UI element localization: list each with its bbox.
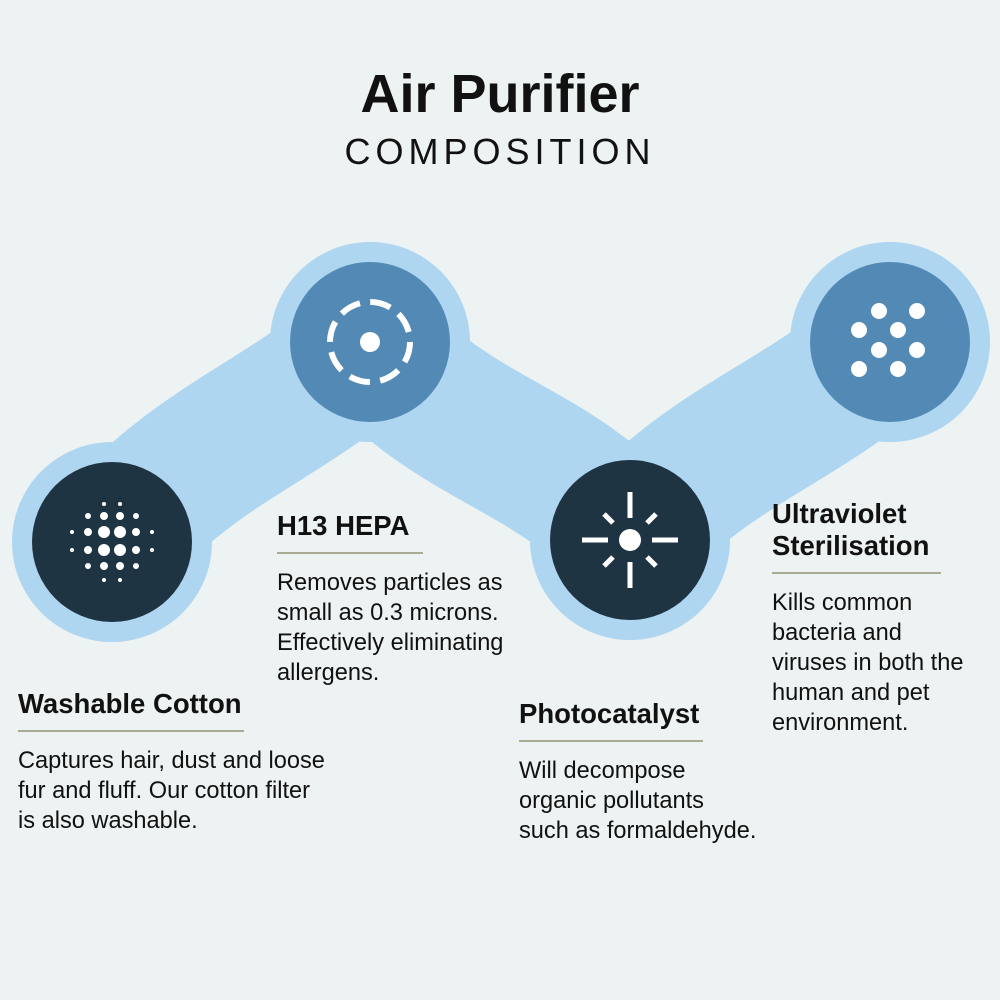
text: H13 HEPA: Removes particles as bbox=[277, 570, 503, 596]
text: Ultraviolet Sterilisation bbox=[772, 498, 963, 736]
text: Photocatalyst: organic pollutants bbox=[519, 788, 704, 814]
text: H13 HEPA bbox=[277, 510, 503, 686]
text: Photocatalyst: Will decompose bbox=[519, 758, 686, 784]
text: Washable Cotton: fur and fluff. Our cotton filter bbox=[18, 778, 310, 804]
text: Ultraviolet Sterilisation: bacteria and bbox=[772, 620, 902, 646]
text: H13 HEPA: allergens. bbox=[277, 660, 379, 686]
text: H13 HEPA: H13 HEPA bbox=[277, 510, 409, 541]
icon: UV bbox=[810, 262, 970, 422]
text: Ultraviolet Sterilisation: human and pet bbox=[772, 680, 929, 706]
text: H13 HEPA: Effectively eliminating bbox=[277, 630, 503, 656]
icon: washable cotton bbox=[32, 462, 192, 622]
text: Ultraviolet Sterilisation: Sterilisation bbox=[772, 530, 929, 561]
text: Photocatalyst bbox=[519, 698, 756, 844]
icon: photocatalyst bbox=[550, 460, 710, 620]
text: Washable Cotton bbox=[18, 688, 325, 834]
text: Ultraviolet Sterilisation: Kills common bbox=[772, 590, 912, 616]
title: COMPOSITION bbox=[344, 131, 656, 172]
text: Ultraviolet Sterilisation: viruses in both the bbox=[772, 650, 963, 676]
text: Photocatalyst: such as formaldehyde. bbox=[519, 818, 756, 844]
text: Photocatalyst: Photocatalyst bbox=[519, 698, 699, 729]
text: Washable Cotton: Washable Cotton bbox=[18, 688, 242, 719]
text: H13 HEPA: small as 0.3 microns. bbox=[277, 600, 499, 626]
title: Air Purifier bbox=[360, 64, 640, 124]
connecting band bbox=[12, 242, 990, 642]
text: Washable Cotton: Captures hair, dust and loose bbox=[18, 748, 325, 774]
text: Ultraviolet Sterilisation: Ultraviolet bbox=[772, 498, 906, 529]
icon: HEPA bbox=[290, 262, 450, 422]
text: Ultraviolet Sterilisation: environment. bbox=[772, 710, 908, 736]
text: Washable Cotton: is also washable. bbox=[18, 808, 198, 834]
title bbox=[344, 64, 656, 172]
